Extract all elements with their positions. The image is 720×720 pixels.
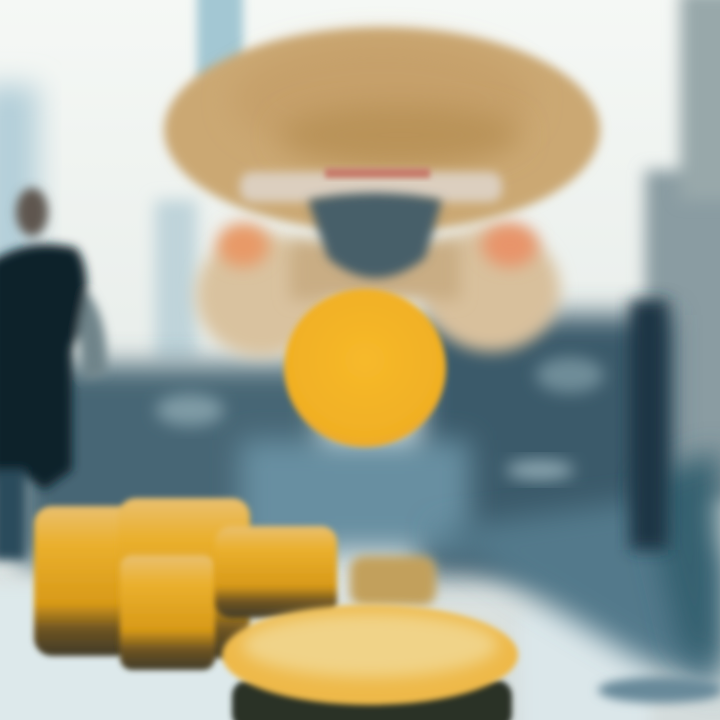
mushroom cap top (164, 28, 600, 232)
large foreground coin (222, 605, 518, 720)
blurred person silhouette left (0, 188, 107, 560)
side lobes (196, 223, 560, 357)
large gold coin (284, 289, 446, 447)
light band under cap (240, 168, 502, 202)
blurred figure right (630, 300, 668, 550)
city skyline mid-ground (20, 315, 670, 575)
central dark stem (308, 193, 442, 278)
background towers (0, 0, 720, 500)
coin stacks (34, 498, 436, 670)
foreground floor (0, 450, 720, 720)
